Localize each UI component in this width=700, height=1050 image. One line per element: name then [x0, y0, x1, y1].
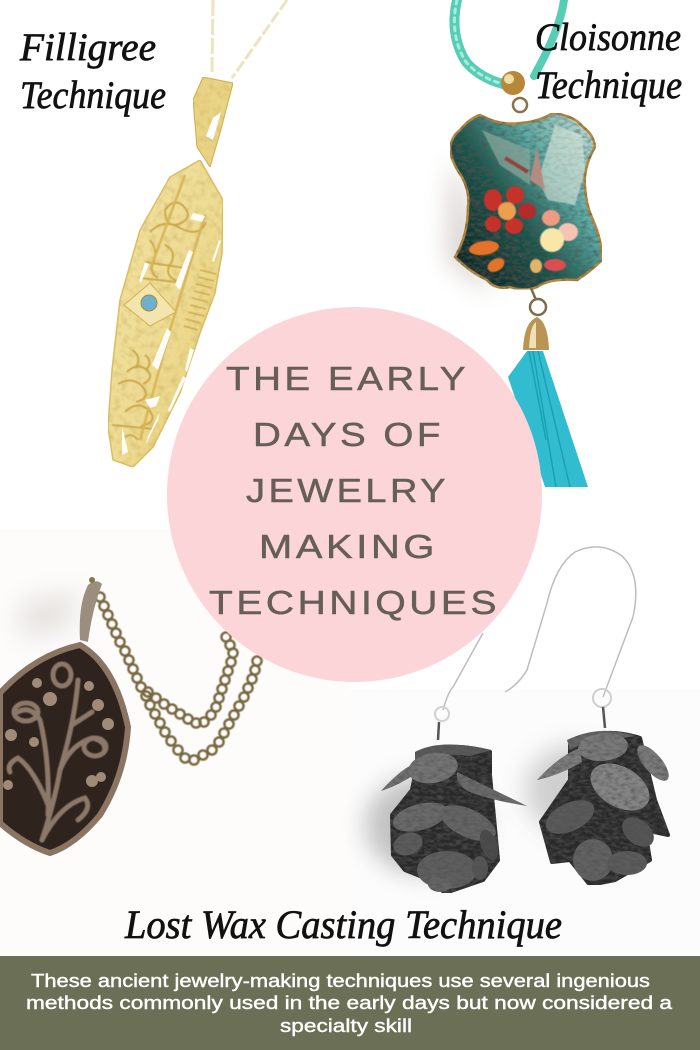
cloisonne top ring	[513, 98, 527, 112]
filigree bail	[193, 77, 233, 167]
photo: lost wax pine cone earrings	[365, 547, 674, 893]
photo: filigree pendant	[108, 0, 287, 467]
title: DAYS OF	[253, 416, 444, 453]
label: Filligree Technique: Filligree	[19, 26, 156, 69]
caption band	[0, 956, 700, 1050]
photo: lost wax pendant and chain	[0, 577, 262, 853]
caption text	[26, 971, 673, 1036]
bronze leaf pendant	[0, 645, 128, 853]
pink flower	[540, 210, 578, 271]
caption text: methods commonly used in the early days but now considered a	[26, 993, 673, 1013]
soft shadows	[365, 775, 485, 875]
pendant bail	[80, 581, 102, 642]
tassel cap	[523, 317, 549, 350]
turquoise tassel	[508, 351, 588, 487]
filigree openings	[122, 213, 221, 455]
left pine cone	[381, 744, 527, 893]
relief dots	[3, 678, 114, 790]
title circle	[167, 307, 542, 682]
earring hooks	[435, 547, 636, 740]
right pine cone	[537, 731, 674, 885]
cloisonne lower ring	[530, 288, 546, 315]
title: TECHNIQUES	[209, 584, 500, 621]
orange buds	[468, 239, 542, 275]
label: Cloisonne Technique: Cloisonne	[535, 16, 681, 59]
title	[209, 360, 500, 621]
label: Filligree Technique	[19, 26, 166, 117]
caption text: specialty skill	[280, 1016, 412, 1036]
icon: blue gemstone	[141, 295, 157, 311]
label: Lost Wax Casting Technique: Lost Wax Casting Technique	[124, 902, 562, 947]
title: JEWELRY	[246, 472, 449, 509]
red flower	[484, 186, 536, 234]
filigree chain	[212, 0, 287, 78]
caption text: These ancient jewelry-making techniques use several ingenious	[31, 971, 650, 991]
label: Cloisonne Technique: Technique	[535, 64, 682, 107]
shadow	[446, 160, 490, 295]
bronze chain	[95, 592, 262, 765]
title: MAKING	[259, 528, 438, 565]
label: Cloisonne Technique	[535, 16, 682, 107]
cloisonne bead	[501, 71, 525, 95]
cloisonne cord	[454, 0, 564, 84]
photo: cloisonne pendant	[446, 0, 602, 487]
filigree scrollwork	[112, 175, 216, 440]
filigree centre plate	[124, 283, 176, 326]
filigree body	[108, 160, 223, 467]
tree relief	[9, 664, 106, 840]
cloisonne body	[450, 113, 602, 290]
shadow	[20, 590, 80, 640]
label: Filligree Technique: Technique	[20, 74, 166, 117]
butterfly	[482, 125, 585, 205]
title: THE EARLY	[226, 360, 469, 397]
